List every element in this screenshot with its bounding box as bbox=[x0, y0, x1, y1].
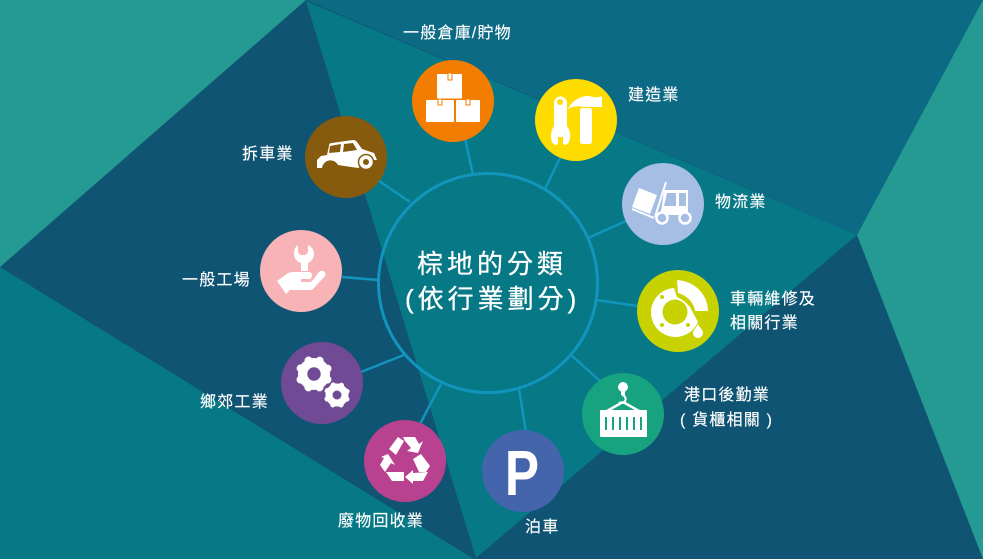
node: rural industry bbox=[281, 342, 363, 424]
node: recycling bbox=[364, 420, 446, 502]
label: vehicle repair: 相關行業 bbox=[730, 314, 799, 332]
node: parking bbox=[482, 430, 564, 512]
central title: (依行業劃分) bbox=[405, 284, 580, 314]
label: recycling: 廢物回收業 bbox=[338, 511, 424, 530]
node: general warehouse bbox=[412, 60, 494, 142]
icon: letter P: P bbox=[505, 439, 539, 509]
node: vehicle dismantling bbox=[305, 116, 387, 198]
icon: container on crane hook bbox=[600, 382, 647, 437]
label: general warehouse: 一般倉庫/貯物 bbox=[403, 24, 512, 42]
icon: hand holding wrench bbox=[277, 245, 325, 294]
icon: recycling arrows bbox=[380, 437, 430, 484]
label: parking: 泊車 bbox=[525, 518, 559, 536]
label: port logistics: ( 貨櫃相關 ) bbox=[680, 411, 773, 429]
label: logistics: 物流業 bbox=[715, 193, 767, 211]
label: vehicle repair: 車輛維修及 bbox=[730, 290, 816, 308]
label: vehicle dismantling: 拆車業 bbox=[242, 145, 294, 163]
central title: 棕地的分類 bbox=[417, 249, 567, 279]
icon: boxes bbox=[426, 73, 480, 122]
icon: forklift bbox=[632, 182, 690, 224]
label: general workshop: 一般工場 bbox=[182, 271, 251, 289]
icon: brake disc bbox=[651, 280, 708, 338]
label: port logistics bbox=[680, 386, 773, 429]
label: vehicle repair bbox=[730, 290, 816, 332]
label: rural industry: 鄉郊工業 bbox=[200, 393, 269, 411]
node: port logistics bbox=[582, 373, 664, 455]
icon: car bbox=[317, 140, 377, 170]
node: general workshop bbox=[260, 230, 342, 312]
node: logistics bbox=[622, 163, 704, 245]
central title bbox=[405, 249, 580, 314]
central circle bbox=[378, 174, 598, 392]
connector lines bbox=[342, 138, 638, 432]
icon: wrench and hammer bbox=[551, 96, 602, 145]
node: vehicle repair bbox=[637, 270, 719, 352]
node: construction bbox=[535, 79, 617, 161]
icon: gears bbox=[295, 355, 351, 409]
label: port logistics: 港口後勤業 bbox=[684, 386, 770, 404]
label: construction: 建造業 bbox=[628, 86, 680, 104]
